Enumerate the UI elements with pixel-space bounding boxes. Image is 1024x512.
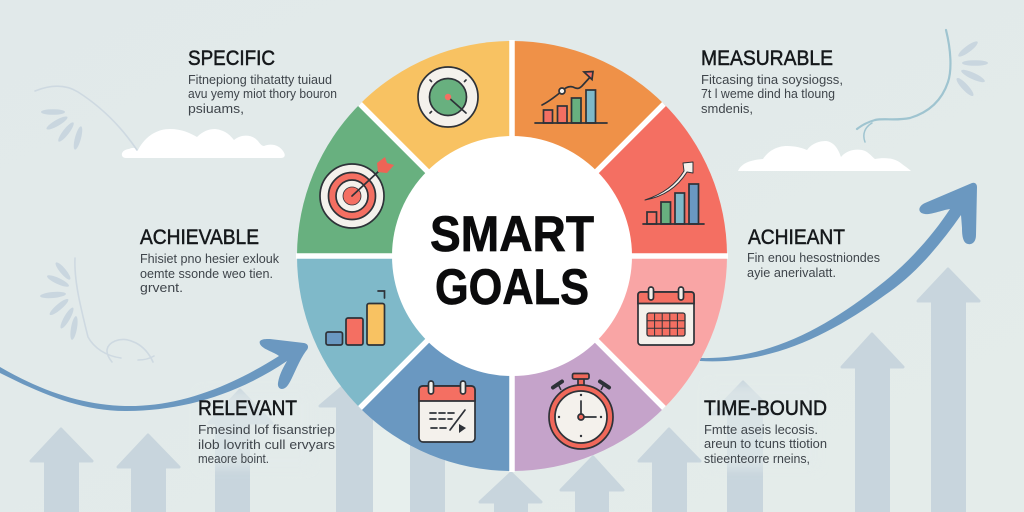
body: Time-Bound: stieenteorre rneins, bbox=[704, 452, 810, 466]
text block: Achievable bbox=[140, 226, 280, 295]
background growth arrows bbox=[31, 269, 979, 512]
text block: Relevant bbox=[198, 397, 335, 466]
body: Relevant: ilob lovrith cull ervyars bbox=[198, 438, 335, 452]
title: SMART GOALS: SMART bbox=[430, 206, 594, 262]
heading: Achievable: ACHIEVABLE bbox=[140, 226, 259, 249]
body: Specific: psiuams, bbox=[188, 102, 244, 116]
body: Achievable: grvent. bbox=[140, 281, 183, 295]
body: Time-Bound bbox=[704, 423, 827, 466]
decorative sprig: mid left bbox=[40, 258, 154, 362]
body: Achievable: Fhisiet pno hesier exlouk bbox=[140, 252, 280, 266]
arrow: rising curve right bbox=[700, 183, 977, 361]
body: Time-Bound: areun to tcuns ttiotion bbox=[704, 437, 827, 451]
body: Measurable bbox=[701, 73, 843, 116]
body: Achieant bbox=[747, 251, 880, 280]
heading: Specific: SPECIFIC bbox=[188, 47, 275, 70]
text block: Specific bbox=[188, 47, 337, 116]
title: SMART GOALS bbox=[430, 206, 594, 315]
body: Achieant: ayie anerivalatt. bbox=[747, 266, 836, 280]
body: Achievable bbox=[140, 252, 280, 295]
body: Specific: avu yemy miot thory bouron bbox=[188, 87, 337, 101]
segment: pink bbox=[512, 256, 727, 408]
arrow: rising curve left bbox=[0, 339, 308, 411]
icon: gauge dial bbox=[418, 67, 478, 127]
segment: purple bbox=[512, 256, 664, 471]
icon: rising bars bbox=[326, 291, 384, 345]
icon: calendar grid bbox=[638, 287, 694, 345]
segment: green bbox=[297, 104, 512, 256]
icon: growth chart with arrow bbox=[643, 162, 704, 224]
heading: Measurable: MEASURABLE bbox=[701, 47, 833, 70]
body: Measurable: 7t l weme dind ha tloung bbox=[701, 87, 835, 101]
heading: Relevant: RELEVANT bbox=[198, 397, 297, 420]
icon: target with dart bbox=[320, 157, 394, 228]
cloud: right bbox=[738, 141, 911, 171]
body: Specific bbox=[188, 73, 337, 116]
cloud: left bbox=[122, 129, 285, 158]
heading: Achieant: ACHIEANT bbox=[748, 226, 845, 249]
segment: yellow bbox=[360, 41, 512, 256]
decorative sprig: top right bbox=[857, 30, 988, 142]
decorative sprig: top left bbox=[35, 86, 137, 150]
heading: Time-Bound: TIME-BOUND bbox=[704, 397, 827, 420]
segment: orange bbox=[512, 41, 664, 256]
text block: Measurable bbox=[701, 47, 843, 116]
wheel: SMART goals bbox=[296, 40, 728, 472]
segment: blue bbox=[360, 256, 512, 471]
text block: Achieant bbox=[747, 226, 880, 280]
icon: stopwatch bbox=[549, 374, 613, 449]
body: Time-Bound: Fmtte aseis lecosis. bbox=[704, 423, 818, 437]
icon: calendar with checklist bbox=[419, 381, 475, 442]
title: SMART GOALS: GOALS bbox=[435, 259, 589, 315]
body: Measurable: Fitcasing tina soysiogss, bbox=[701, 73, 843, 87]
segment: teal bbox=[297, 256, 512, 408]
body: Measurable: smdenis, bbox=[701, 102, 753, 116]
segment: red bbox=[512, 104, 727, 256]
body: Achieant: Fin enou hesostniondes bbox=[747, 251, 880, 265]
body: Achievable: oemte ssonde weo tien. bbox=[140, 267, 273, 281]
body: Relevant: Fmesind lof fisanstriep bbox=[198, 423, 335, 437]
text block: Time-Bound bbox=[704, 397, 827, 466]
body: Specific: Fitnepiong tihatatty tuiaud bbox=[188, 73, 332, 87]
body: Relevant bbox=[198, 423, 335, 466]
haze behind lower labels bbox=[200, 385, 818, 469]
body: Relevant: meaore boint. bbox=[198, 452, 269, 466]
icon: bar chart with trend line bbox=[535, 72, 607, 123]
